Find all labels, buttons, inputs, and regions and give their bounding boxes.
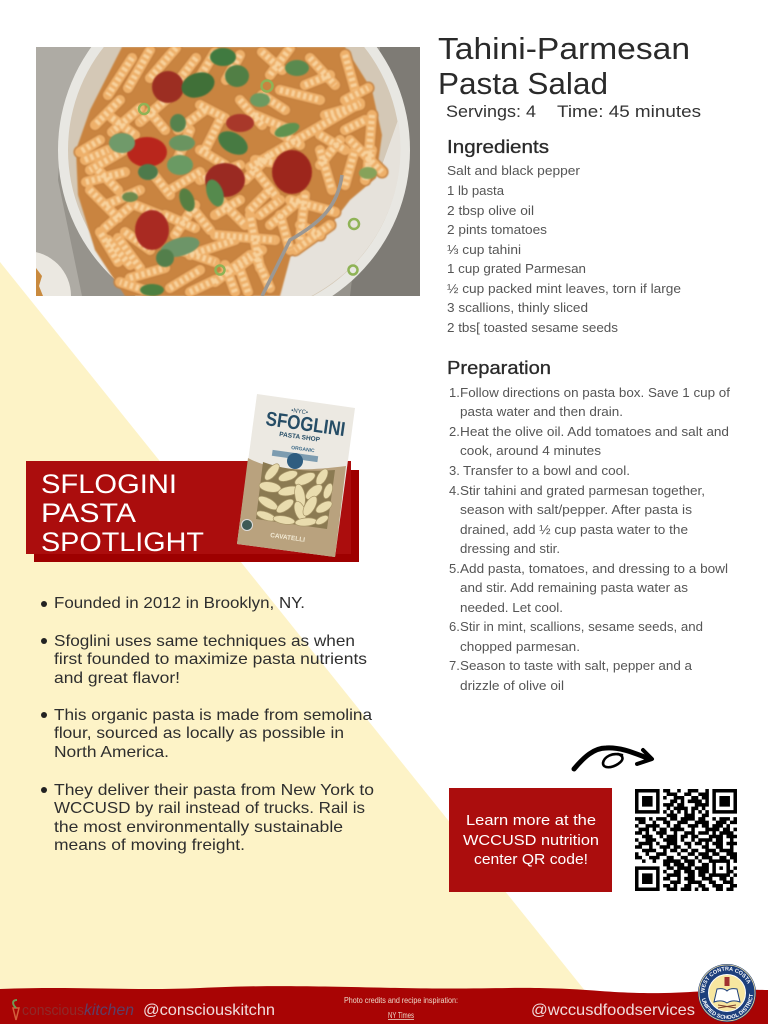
preparation steps: chopped parmesan.	[460, 639, 580, 654]
preparation steps: 1.	[449, 385, 460, 400]
logo: conscious kitchen	[13, 1000, 134, 1020]
preparation steps: drizzle of olive oil	[460, 678, 564, 693]
preparation steps: Transfer to a bowl and cool.	[463, 463, 630, 478]
logo: conscious kitchen: conscious	[22, 1002, 84, 1019]
bullet: rail delivery: They deliver their pasta from New York to	[54, 782, 374, 799]
icon: pasta package: CAVATELLI	[270, 532, 306, 544]
preparation steps: pasta water and then drain.	[460, 404, 623, 419]
preparation steps: and stir. Add remaining pasta water as	[460, 580, 689, 595]
ingredients list: 2 tbs[ toasted sesame seeds	[447, 320, 619, 335]
bullet: techniques: Sfoglini uses same techniques as when	[54, 633, 355, 650]
bullet: rail delivery: means of moving freight.	[54, 837, 245, 854]
mint leaves	[109, 48, 377, 296]
bullet: rail delivery: WCCUSD by rail instead of trucks. Rail is	[54, 800, 365, 817]
preparation steps: 6.	[449, 619, 460, 634]
preparation steps: Season to taste with salt, pepper and a	[460, 658, 693, 673]
preparation steps: Add pasta, tomatoes, and dressing to a bowl	[460, 561, 728, 576]
bullet: organic: North America.	[54, 744, 169, 761]
icon: district seal: WEST CONTRA COSTA	[700, 966, 750, 993]
background triangle	[0, 262, 586, 992]
photo credits: NY Times	[388, 1011, 414, 1020]
ingredients list: 2 pints tomatoes	[447, 222, 548, 237]
logo: conscious kitchen: kitchen	[84, 1002, 134, 1019]
arrow	[574, 748, 652, 769]
ingredients list: ⅓ cup tahini	[447, 242, 521, 257]
handle: wccusd: @wccusdfoodservices	[531, 1002, 695, 1019]
title: Pasta Salad	[438, 66, 608, 101]
pasta	[76, 47, 382, 296]
bullet: techniques: first founded to maximize pasta nutrients	[54, 651, 367, 668]
bullet: rail delivery	[41, 782, 374, 854]
bowl	[58, 47, 410, 296]
bullet: rail delivery: the most environmentally sustainable	[54, 819, 343, 836]
ingredients heading: Ingredients	[447, 137, 549, 157]
QR code	[635, 789, 737, 891]
preparation steps: drained, add ½ cup pasta water to the	[460, 522, 688, 537]
title: Tahini-Parmesan	[438, 31, 690, 66]
preparation steps: Stir in mint, scallions, sesame seeds, and	[460, 619, 703, 634]
fork	[262, 175, 342, 296]
icon: district seal	[698, 964, 756, 1022]
preparation steps: 4.	[449, 483, 460, 498]
bullet: organic: This organic pasta is made from semolina	[54, 707, 372, 724]
scallions	[139, 80, 359, 274]
bullet: organic: flour, sourced as locally as possible in	[54, 725, 344, 742]
bullet: organic	[41, 707, 372, 761]
callout: learn more: Learn more at the	[466, 812, 596, 829]
ingredients list: 1 cup grated Parmesan	[447, 261, 586, 276]
preparation steps: needed. Let cool.	[460, 600, 563, 615]
ingredients list: 1 lb pasta	[447, 183, 505, 198]
ingredients list: Salt and black pepper	[447, 163, 581, 178]
callout: learn more: WCCUSD nutrition	[463, 832, 599, 849]
preparation steps: Stir tahini and grated parmesan together,	[460, 483, 705, 498]
title	[438, 31, 690, 101]
icon: pasta package	[237, 394, 355, 557]
icon: pasta package: PASTA SHOP	[279, 431, 321, 444]
spotlight banner: SFLOGINI	[41, 469, 177, 499]
bullet: techniques: and great flavor!	[54, 670, 180, 687]
spotlight banner: SPOTLIGHT	[41, 527, 204, 557]
handle: conscious kitchen: @consciouskitchn	[143, 1002, 275, 1019]
icon: district seal: UNIFIED SCHOOL DISTRICT	[702, 994, 753, 1019]
bullet: techniques	[41, 633, 367, 687]
icon: pasta package: SFOGLINI	[264, 408, 347, 441]
ingredients list: 2 tbsp olive oil	[447, 203, 534, 218]
preparation steps: season with salt/pepper. After pasta is	[460, 502, 693, 517]
photo credits	[344, 996, 458, 1020]
preparation steps: Heat the olive oil. Add tomatoes and salt and	[460, 424, 729, 439]
photo credits: Photo credits and recipe inspiration:	[344, 996, 458, 1005]
icon: pasta package: •NYC•	[291, 408, 308, 416]
preparation steps: dressing and stir.	[460, 541, 560, 556]
ingredients list: 3 scallions, thinly sliced	[447, 300, 588, 315]
servings and time: Time: 45 minutes	[557, 102, 701, 121]
servings and time	[446, 102, 701, 121]
bullet: founded: Founded in 2012 in Brooklyn, NY.	[54, 595, 305, 612]
preparation steps	[449, 385, 730, 693]
servings and time: Servings: 4	[446, 102, 536, 121]
recipe photo	[36, 47, 420, 296]
side plate	[36, 252, 71, 296]
preparation heading: Preparation	[447, 358, 551, 378]
preparation steps: 3.	[449, 463, 460, 478]
spotlight banner	[26, 461, 359, 562]
footer band	[0, 986, 768, 1024]
preparation steps: 2.	[449, 424, 460, 439]
ingredients list	[447, 163, 681, 335]
spotlight banner: PASTA	[41, 498, 136, 528]
tomatoes	[127, 71, 312, 250]
preparation steps: 5.	[449, 561, 460, 576]
ingredients list: ½ cup packed mint leaves, torn if large	[447, 281, 681, 296]
preparation steps: 7.	[449, 658, 460, 673]
preparation steps: Follow directions on pasta box. Save 1 cup of	[460, 385, 730, 400]
icon: pasta package: ORGANIC	[291, 445, 315, 454]
callout: learn more	[449, 788, 612, 892]
preparation steps: cook, around 4 minutes	[460, 443, 602, 458]
callout: learn more: center QR code!	[474, 851, 588, 868]
